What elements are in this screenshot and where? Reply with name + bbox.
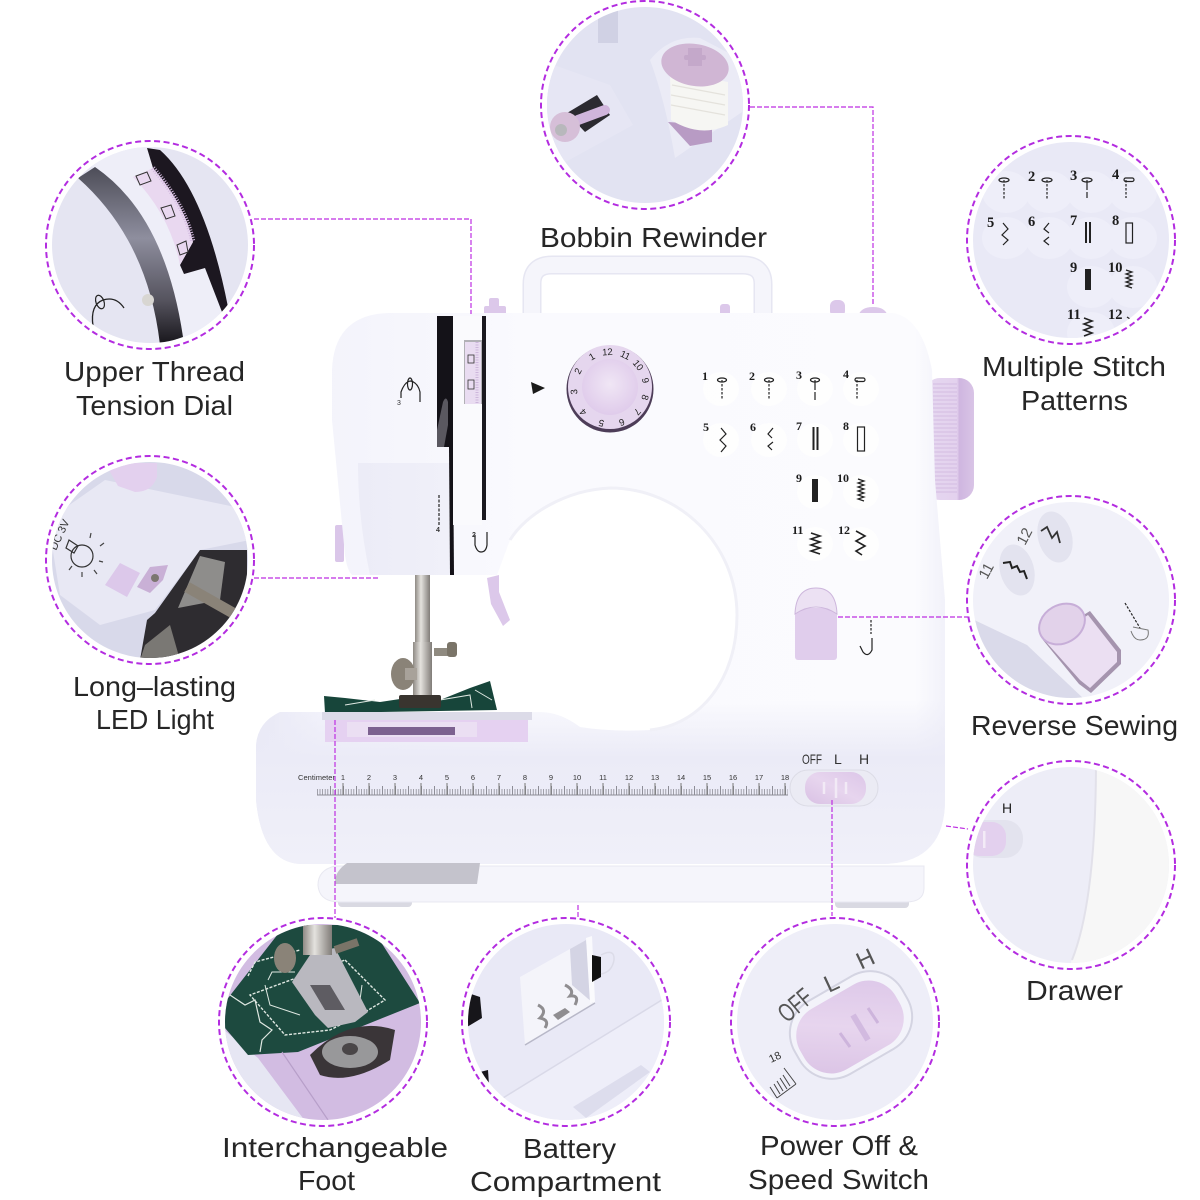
label: battery compartment: Battery bbox=[523, 1133, 616, 1164]
hand wheel bbox=[925, 378, 974, 500]
stitch pattern chart: 6 bbox=[750, 420, 756, 434]
panel: drawer bbox=[965, 760, 1180, 972]
left lamp switch bbox=[335, 525, 344, 562]
panel: power off and speed switch: 18 bbox=[767, 1050, 783, 1066]
stitch pattern chart: 8 bbox=[843, 419, 849, 433]
stitch selector dial: 2 bbox=[573, 366, 585, 376]
panel: reverse sewing bbox=[965, 495, 1180, 710]
centimeter ruler: 18 bbox=[781, 773, 789, 782]
thread take-up lever bbox=[487, 575, 510, 626]
centimeter ruler: 8 bbox=[523, 773, 527, 782]
thread guide icon 3 bbox=[397, 378, 420, 407]
arm opening rim bbox=[510, 488, 737, 730]
centimeter ruler: 11 bbox=[599, 773, 607, 782]
label: reverse sewing: Reverse Sewing bbox=[971, 710, 1178, 741]
centimeter ruler: Centimeter bbox=[298, 773, 336, 782]
panel: power off and speed switch: OFF bbox=[772, 982, 818, 1028]
panel: multiple stitch patterns: 7 bbox=[1070, 213, 1077, 229]
panel: power off and speed switch: L bbox=[820, 968, 843, 998]
centimeter ruler: 4 bbox=[419, 773, 423, 782]
panel: LED light: DC 3V bbox=[48, 517, 73, 552]
centimeter ruler bbox=[298, 773, 789, 795]
head front panel bbox=[437, 316, 486, 575]
stitch pattern chart: 11 bbox=[792, 523, 803, 537]
centimeter ruler: 5 bbox=[445, 773, 449, 782]
stitch pattern chart: 1 bbox=[702, 369, 708, 383]
drawer pull bbox=[335, 863, 480, 884]
panel: interchangeable foot bbox=[218, 918, 430, 1128]
panel: upper thread tension dial bbox=[45, 140, 255, 350]
machine feet bbox=[338, 898, 909, 908]
panel: power off and speed switch: H bbox=[852, 943, 879, 975]
label: upper thread tension dial: Tension Dial bbox=[76, 390, 233, 421]
speed switch: H bbox=[859, 751, 869, 767]
stitch selector dial: 7 bbox=[631, 406, 643, 417]
centimeter ruler: 15 bbox=[703, 773, 711, 782]
panel: multiple stitch patterns: 11 bbox=[1067, 307, 1081, 323]
label: power off and speed switch: Speed Switch bbox=[748, 1164, 929, 1195]
stitch selector dial: 4 bbox=[578, 406, 589, 417]
centimeter ruler: 9 bbox=[549, 773, 553, 782]
panel: drawer: H bbox=[1002, 800, 1012, 816]
top knobs bbox=[484, 298, 888, 317]
thread guide icon 2 bbox=[472, 532, 487, 552]
label: interchangeable foot: Interchangeable bbox=[222, 1132, 448, 1163]
panel: bobbin rewinder bbox=[540, 0, 750, 210]
centimeter ruler: 13 bbox=[651, 773, 659, 782]
label: interchangeable foot: Foot bbox=[298, 1165, 355, 1196]
label: drawer: Drawer bbox=[1026, 975, 1123, 1006]
stitch pattern chart: 10 bbox=[837, 471, 849, 485]
centimeter ruler: 3 bbox=[393, 773, 397, 782]
panel: multiple stitch patterns: 3 bbox=[1070, 168, 1077, 184]
panel: multiple stitch patterns: 8 bbox=[1112, 213, 1119, 229]
needle plate bbox=[322, 712, 532, 742]
stitch pattern chart: 3 bbox=[796, 368, 802, 382]
centimeter ruler: 10 bbox=[573, 773, 581, 782]
panel: multiple stitch patterns: 10 bbox=[1108, 260, 1122, 276]
thread guide icon 2: 2 bbox=[472, 532, 476, 539]
panel: multiple stitch patterns: 4 bbox=[1112, 167, 1119, 183]
centimeter ruler: 6 bbox=[471, 773, 475, 782]
panel: multiple stitch patterns: 6 bbox=[1028, 214, 1035, 230]
machine body bbox=[250, 310, 950, 870]
label: bobbin rewinder: Bobbin Rewinder bbox=[540, 222, 767, 253]
stitch selector dial: 5 bbox=[598, 416, 605, 428]
machine base bbox=[318, 866, 924, 902]
stitch selector dial: 12 bbox=[602, 347, 613, 358]
centimeter ruler: 12 bbox=[625, 773, 633, 782]
stitch selector dial: 1 bbox=[587, 351, 597, 363]
centimeter ruler: 16 bbox=[729, 773, 737, 782]
speed switch bbox=[790, 751, 878, 806]
stitch selector dial: 3 bbox=[569, 389, 580, 395]
label: upper thread tension dial: Upper Thread bbox=[64, 356, 245, 387]
stitch selector dial: 10 bbox=[630, 358, 645, 373]
fabric bbox=[324, 681, 497, 713]
stitch selector dial: 11 bbox=[618, 349, 632, 363]
stitch pattern chart: 12 bbox=[838, 523, 850, 537]
stitch pattern chart: 7 bbox=[796, 419, 802, 433]
centimeter ruler: 1 bbox=[341, 773, 345, 782]
label: LED light: LED Light bbox=[96, 704, 214, 735]
panel: LED light bbox=[45, 455, 255, 665]
speed switch: OFF bbox=[802, 751, 822, 767]
stitch selector dial: 9 bbox=[639, 377, 651, 384]
panel: battery compartment bbox=[460, 915, 675, 1130]
panel: multiple stitch patterns: 9 bbox=[1070, 260, 1077, 276]
centimeter ruler: 17 bbox=[755, 773, 763, 782]
thread guide icon 4: 4 bbox=[436, 527, 440, 534]
stitch pattern chart: 9 bbox=[796, 471, 802, 485]
thread guide icon 3: 3 bbox=[397, 400, 401, 407]
centimeter ruler: 14 bbox=[677, 773, 685, 782]
stitch pattern chart: 2 bbox=[749, 369, 755, 383]
thread guide icon 4 bbox=[436, 495, 440, 534]
panel: power off and speed switch bbox=[730, 915, 945, 1130]
centimeter ruler: 7 bbox=[497, 773, 501, 782]
speed switch: L bbox=[834, 751, 842, 767]
panel: reverse sewing: 11 bbox=[976, 560, 998, 582]
reverse lever bbox=[795, 588, 872, 660]
stitch pattern chart bbox=[702, 367, 879, 561]
label: power off and speed switch: Power Off & bbox=[760, 1130, 918, 1161]
panel: reverse sewing: 12 bbox=[1014, 525, 1036, 548]
panel: multiple stitch patterns: 2 bbox=[1028, 169, 1035, 185]
label: multiple stitch patterns: Patterns bbox=[1021, 385, 1128, 416]
label: LED light: Long–lasting bbox=[73, 671, 236, 702]
dial arrow bbox=[531, 382, 545, 394]
stitch selector dial bbox=[566, 345, 654, 432]
leader lines bbox=[254, 107, 968, 918]
stitch pattern chart: 5 bbox=[703, 420, 709, 434]
stitch pattern chart: 4 bbox=[843, 367, 849, 381]
label: multiple stitch patterns: Multiple Stitch bbox=[982, 351, 1166, 382]
sewing machine bbox=[250, 265, 974, 908]
needle assembly bbox=[391, 575, 457, 702]
panel: multiple stitch patterns bbox=[965, 135, 1180, 354]
stitch selector dial: 6 bbox=[617, 416, 626, 428]
centimeter ruler: 2 bbox=[367, 773, 371, 782]
stitch selector dial: 8 bbox=[638, 393, 650, 401]
carry handle bbox=[532, 265, 763, 318]
panel: multiple stitch patterns: 5 bbox=[987, 215, 994, 231]
label: battery compartment: Compartment bbox=[470, 1166, 661, 1197]
panel: multiple stitch patterns: 12 bbox=[1108, 307, 1122, 323]
